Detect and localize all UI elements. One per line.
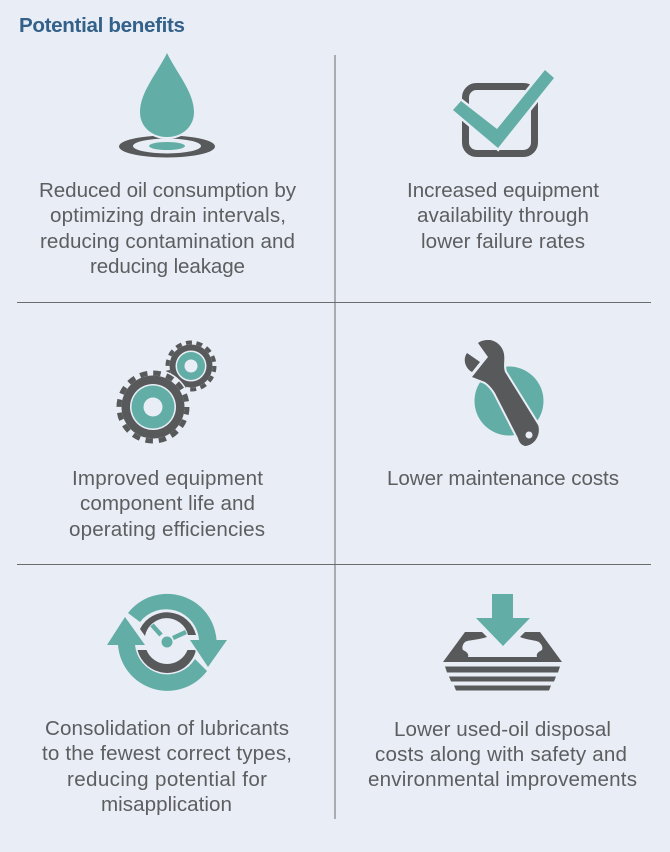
text: improved component life: component life and	[80, 492, 255, 515]
icon: wrench	[465, 340, 544, 446]
text: lower maintenance costs: Lower maintenance costs	[387, 467, 619, 490]
title: Potential benefits	[19, 14, 185, 37]
icon: oil drop	[119, 53, 215, 158]
text: lower used-oil disposal: Lower used-oil disposal	[394, 718, 611, 741]
icon: clock with cycle arrows	[107, 594, 227, 691]
text: increased availability: Increased equipment	[407, 179, 599, 202]
icon: gears	[115, 342, 214, 445]
text: lower used-oil disposal: environmental improvements	[368, 768, 637, 791]
text: improved component life	[69, 467, 265, 541]
text: reduced oil consumption: Reduced oil consumption by	[39, 179, 297, 202]
text: reduced oil consumption: optimizing drain intervals,	[50, 204, 286, 227]
text: lower used-oil disposal	[368, 718, 637, 791]
text: consolidation of lubricants: Consolidation of lubricants	[45, 717, 289, 740]
text: improved component life: operating efficiencies	[69, 518, 265, 541]
icon: checkbox	[453, 70, 554, 154]
icon: tray with arrow	[443, 594, 562, 690]
text: consolidation of lubricants: reducing potential for	[67, 768, 267, 791]
text: improved component life: Improved equipment	[72, 467, 263, 490]
text: reduced oil consumption	[39, 179, 297, 278]
text: increased availability: availability through	[417, 204, 589, 227]
text: increased availability: lower failure rates	[421, 230, 585, 253]
text: reduced oil consumption: reducing leakage	[90, 255, 245, 278]
text: consolidation of lubricants: to the fewest correct types,	[42, 742, 292, 765]
text: consolidation of lubricants	[42, 717, 292, 816]
text: consolidation of lubricants: misapplication	[101, 793, 232, 816]
text: reduced oil consumption: reducing contamination and	[40, 230, 295, 253]
text: increased availability	[407, 179, 599, 253]
text: lower used-oil disposal: costs along with safety and	[375, 743, 627, 766]
